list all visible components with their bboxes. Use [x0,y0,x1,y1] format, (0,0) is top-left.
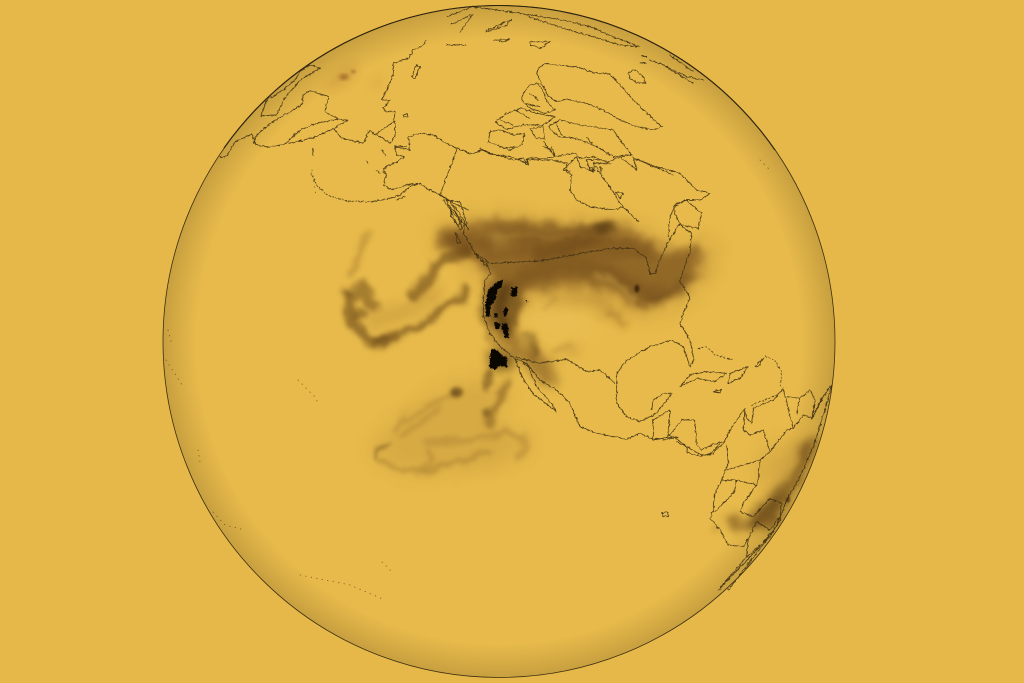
coast: Canadian arctic shoreline [480,148,673,175]
coast: northern South America [725,388,793,452]
smoke: spot in southern Brazil [786,498,790,502]
coast: Sea of Okhotsk [261,65,320,116]
border: USA and Mexico [516,357,615,383]
coastlines: contiguous USA, Canada, Mexico [443,200,720,455]
coast: Central America borders [653,410,697,445]
coast: Pacific North America [443,200,720,455]
coast: Hudson Bay lakes [590,167,603,172]
small Pacific islands [166,160,770,600]
coast: Cuba [680,372,727,387]
smoke: fire halos [487,280,520,370]
border: Chukotka [377,122,407,147]
smoke: dense spot over Midwest [635,285,639,293]
coastlines: Arctic Canada and Greenland [480,63,673,175]
coast: Hispaniola [728,367,748,383]
smoke: Pacific swirl [347,228,477,346]
smoke: dense spots in the south plume [450,387,490,417]
smoke: northern plume across USA and Canada [433,213,717,317]
coast: Jamaica and Puerto Rico [713,358,763,393]
coast: Kamchatka [253,91,348,144]
border: Bolivia, Paraguay, Argentina [718,485,782,590]
coast: Sakhalin and New Siberian [403,65,420,117]
coast: Pacific South America [710,445,748,547]
infographic: smoke globe [162,5,836,678]
coastlines: top of Eurasia [440,7,710,237]
globe disc [163,6,835,678]
globe outline [163,5,835,677]
smoke: southern Pacific plume [370,371,528,475]
coast: Iceland [628,69,646,83]
coast: Europe edge [641,55,703,83]
coastlines: Caribbean and South America [653,347,832,590]
smoke: pale clear area over the interior west [519,298,556,342]
coast: Parry islands [495,108,555,129]
islands: Polynesia [300,575,385,600]
coast: Russia Pacific and Arctic [220,40,427,157]
coast: Hudson Bay [567,157,710,237]
islands: western Pacific [166,330,245,530]
coast: Guianas [787,390,815,428]
coast: Alaska [383,133,470,190]
coast: Banks and Victoria [488,130,525,150]
wildfire hotspots [485,279,527,369]
smoke: central west and southwest [482,278,627,388]
border: Peru [715,480,737,512]
coast: Bahamas and Antilles [698,347,782,405]
coast: small islands [313,148,405,200]
islands: far north [312,160,770,195]
border: USA and Canada [490,223,680,274]
coast: eastern limb [718,385,832,590]
border: Colombia and Brazil [722,452,770,485]
coast: northern mainland Canada [470,150,567,165]
coast: Ellesmere island [522,83,555,113]
coast: Alaska panhandle [440,195,468,230]
globe rim shading [163,6,835,678]
coastlines: Siberia and Alaska [220,40,470,210]
coast: Greenland [537,63,662,130]
border: Alaska and Canada [440,148,457,195]
coast: Baja California [515,358,557,412]
coast: Siberian arctic and Scandinavia [447,7,639,47]
islands: Hawaii [298,380,318,404]
coast: Aleutian chain [311,172,370,202]
smoke: Siberia [328,66,358,90]
coast: Galapagos [662,512,668,517]
coast: Arctic Russian islands [447,14,550,48]
coast: panhandle islands [450,207,488,267]
coast: Baffin [548,120,632,157]
smoke layers [163,6,835,678]
smoke: South America [710,435,817,533]
coast: Atlantic Canada [617,200,702,422]
